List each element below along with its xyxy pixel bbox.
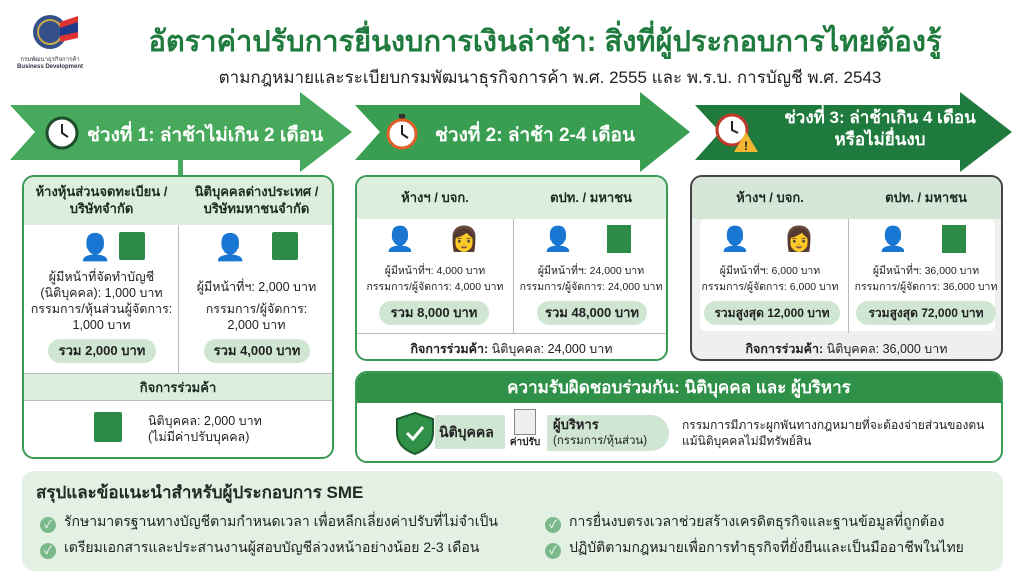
- panel: joint liability: ความรับผิดชอบร่วมกัน: นิติบุคคล และ ผู้บริหาร: [507, 378, 851, 397]
- panel: phase 3: [690, 175, 1003, 361]
- subtitle: ตามกฎหมายและระเบียบกรมพัฒนาธุรกิจการค้า พ.ศ. 2555 และ พ.ร.บ. การบัญชี พ.ศ. 2543: [219, 68, 881, 87]
- panel: summary: การยื่นงบตรงเวลาช่วยสร้างเครดิตธุรกิจและฐานข้อมูลที่ถูกต้อง: [569, 513, 944, 529]
- panel: phase 3: 👤: [720, 226, 750, 253]
- panel: phase 1: กรรมการ/ผู้จัดการ:: [206, 302, 307, 316]
- panel: phase 2: ห้างฯ / บจก.: [401, 190, 469, 205]
- panel: summary: รักษามาตรฐานทางบัญชีตามกำหนดเวลา เพื่อหลีกเลี่ยงค่าปรับที่ไม่จำเป็น: [64, 513, 498, 529]
- panel: phase 2: [355, 175, 668, 361]
- panel: summary: ✓: [44, 545, 52, 557]
- panel: phase 1: 1,000 บาท: [73, 318, 130, 332]
- panel: phase 1: รวม 4,000 บาท: [214, 343, 300, 358]
- panel: phase 2: 👤: [385, 226, 415, 253]
- panel: phase 2: ผู้มีหน้าที่ฯ: 24,000 บาท: [538, 265, 644, 277]
- panel: phase 2: กรรมการ/ผู้จัดการ: 4,000 บาท: [367, 281, 503, 293]
- panel: summary: ปฏิบัติตามกฎหมายเพื่อการทำธุรกิจที่ยั่งยืนและเป็นมืออาชีพในไทย: [569, 539, 964, 555]
- phase 3 label: [716, 105, 976, 152]
- phase 2 label: [386, 114, 635, 150]
- panel: joint liability: [355, 371, 1003, 463]
- icon: clock: [46, 116, 78, 150]
- panel: phase 2: ผู้มีหน้าที่ฯ: 4,000 บาท: [385, 265, 485, 277]
- panel: phase 1: (ไม่มีค่าปรับบุคคล): [148, 430, 249, 444]
- logo: กรมพัฒนาธุรกิจการค้า: [20, 57, 80, 63]
- panel: joint liability: กรรมการมีภาระผูกพันทางกฎหมายที่จะต้องจ่ายส่วนของตน: [682, 418, 984, 432]
- panel: phase 2: 👤: [543, 226, 573, 253]
- panel: phase 3: ห้างฯ / บจก.: [736, 190, 804, 205]
- panel: summary: ✓: [549, 545, 557, 557]
- panel: phase 1: [22, 175, 334, 459]
- panel: summary: เตรียมเอกสารและประสานงานผู้สอบบัญชีล่วงหน้าอย่างน้อย 2-3 เดือน: [64, 539, 479, 555]
- panel: phase 2: ตปท. / มหาชน: [550, 190, 632, 205]
- panel: phase 1: กิจการร่วมค้า: [140, 380, 216, 395]
- phase 2 label: ช่วงที่ 2: ล่าช้า 2-4 เดือน: [435, 125, 635, 146]
- panel: phase 1: 👤: [214, 232, 246, 262]
- panel: summary: [22, 471, 1003, 571]
- panel: phase 2: รวม 48,000 บาท: [545, 305, 639, 320]
- logo: [17, 15, 83, 70]
- panel: summary: ✓: [549, 519, 557, 531]
- panel: phase 3: กรรมการ/ผู้จัดการ: 36,000 บาท: [855, 281, 997, 293]
- panel: phase 1: กรรมการ/หุ้นส่วนผู้จัดการ:: [31, 302, 172, 316]
- panel: phase 3: ผู้มีหน้าที่ฯ: 6,000 บาท: [720, 265, 820, 277]
- panel: summary: ✓: [44, 519, 52, 531]
- panel: phase 1: นิติบุคคลต่างประเทศ /: [195, 184, 318, 199]
- phase 1 label: [46, 116, 323, 150]
- phase 3 label: หรือไม่ยื่นงบ: [834, 130, 925, 149]
- panel: phase 3: ผู้มีหน้าที่ฯ: 36,000 บาท: [873, 265, 979, 277]
- panel: phase 2: รวม 8,000 บาท: [391, 305, 477, 320]
- panel: joint liability: ค่าปรับ: [510, 437, 540, 448]
- panel: phase 3: 👤: [878, 226, 908, 253]
- panel: joint liability: (กรรมการ/หุ้นส่วน): [553, 435, 647, 447]
- panel: joint liability: แม้นิติบุคคลไม่มีทรัพย์สิน: [682, 434, 811, 448]
- arrow banners: [10, 92, 1012, 175]
- panel: phase 1: นิติบุคคล: 2,000 บาท: [148, 414, 262, 428]
- panel: phase 3: รวมสูงสุด 72,000 บาท: [868, 306, 984, 320]
- panel: phase 2: 👩: [449, 226, 479, 253]
- panel: phase 1: 2,000 บาท: [228, 318, 285, 332]
- phase 3 label: ช่วงที่ 3: ล่าช้าเกิน 4 เดือน: [784, 108, 976, 127]
- panel: phase 3: กิจการร่วมค้า: นิติบุคคล: 36,000 บาท: [745, 342, 948, 356]
- panel: phase 3: 👩: [784, 226, 814, 253]
- panel: phase 3: ตปท. / มหาชน: [885, 190, 967, 205]
- panel: phase 1: 👤: [79, 232, 111, 262]
- panel: phase 2: กิจการร่วมค้า: นิติบุคคล: 24,000 บาท: [410, 342, 613, 356]
- panel: phase 3: กรรมการ/ผู้จัดการ: 6,000 บาท: [702, 281, 838, 293]
- icon: alarm clock warning: [716, 114, 758, 152]
- panel: joint liability: ผู้บริหาร: [553, 417, 599, 432]
- phase 1 label: ช่วงที่ 1: ล่าช้าไม่เกิน 2 เดือน: [87, 125, 323, 146]
- logo: Business Development: [17, 64, 83, 70]
- panel: joint liability: นิติบุคคล: [439, 424, 494, 440]
- panel: phase 2: กรรมการ/ผู้จัดการ: 24,000 บาท: [520, 281, 662, 293]
- panel: phase 1: (นิติบุคคล): 1,000 บาท: [40, 286, 163, 300]
- panel: phase 3: รวมสูงสุด 12,000 บาท: [714, 306, 830, 320]
- panel: phase 1: ผู้มีหน้าที่ฯ: 2,000 บาท: [197, 280, 316, 294]
- panel: phase 1: บริษัทมหาชนจำกัด: [204, 201, 309, 216]
- panel: phase 1: บริษัทจำกัด: [70, 201, 133, 216]
- panel: phase 1: รวม 2,000 บาท: [59, 343, 145, 358]
- icon: stopwatch: [386, 114, 418, 150]
- panel: summary: สรุปและข้อแนะนำสำหรับผู้ประกอบการ SME: [36, 483, 363, 502]
- title: อัตราค่าปรับการยื่นงบการเงินล่าช้า: สิ่งที่ผู้ประกอบการไทยต้องรู้: [148, 26, 942, 58]
- panel: phase 1: ผู้มีหน้าที่จัดทำบัญชี: [49, 270, 154, 284]
- panel: phase 1: ห้างหุ้นส่วนจดทะเบียน /: [36, 184, 167, 199]
